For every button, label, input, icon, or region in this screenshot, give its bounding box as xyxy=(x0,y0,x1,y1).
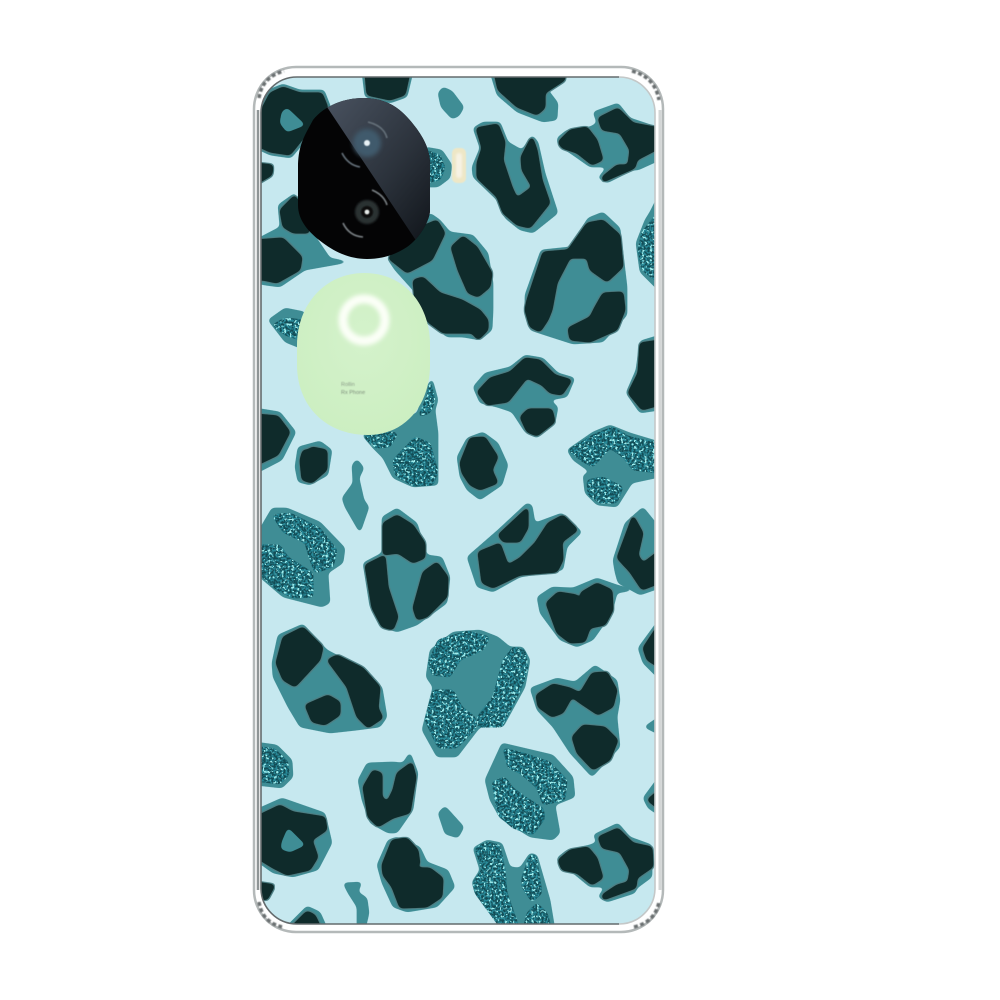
spot: top right xyxy=(557,103,660,183)
spot: bottom left xyxy=(255,798,332,877)
spot: behind camera glitter xyxy=(425,147,452,187)
spot: centre right xyxy=(473,355,575,438)
spot: glitter under pill xyxy=(362,378,438,487)
spot: glitter large centre xyxy=(422,630,530,757)
spot: right edge tiny xyxy=(644,782,654,813)
small print: Rx Phone xyxy=(341,390,365,396)
upper lens xyxy=(342,122,387,167)
spot: left edge small xyxy=(262,162,274,184)
spot: left edge glitter xyxy=(262,742,294,788)
lower lens xyxy=(343,190,387,237)
spot: right edge dark xyxy=(626,336,654,413)
spot: small teal top xyxy=(438,87,464,119)
corner air cushions xyxy=(259,71,659,927)
small print xyxy=(341,382,365,396)
spot: left dark xyxy=(262,408,296,471)
spot: top right of centre xyxy=(491,78,567,122)
green pill module xyxy=(297,273,430,435)
spot: large right xyxy=(525,212,627,344)
spot: centre dark xyxy=(363,508,450,632)
small print: Rollin xyxy=(341,382,355,388)
spot: dark oval centre xyxy=(457,432,508,500)
spot: lower left xyxy=(272,624,387,733)
spot: small teal right xyxy=(646,720,654,732)
camera module xyxy=(298,98,440,259)
camera flash xyxy=(452,148,466,183)
spot: bottom centre xyxy=(377,837,455,912)
spot: bottom right xyxy=(557,823,653,902)
spot: behind camera left xyxy=(262,194,344,287)
spot: behind pill left glitter xyxy=(269,308,304,348)
phone case back panel xyxy=(261,77,655,924)
spot: glitter lower xyxy=(485,743,575,840)
spot: small teal sliver xyxy=(342,459,369,533)
spot: top centre xyxy=(362,78,412,103)
spot: glitter left xyxy=(255,508,345,607)
spot: large centre xyxy=(387,213,493,340)
spot: top left xyxy=(255,84,331,158)
spot: L shape xyxy=(472,122,558,233)
spot: glitter right xyxy=(567,425,660,507)
spot: right middle xyxy=(612,508,654,595)
spot: glitter bottom xyxy=(472,840,555,930)
spot: corner dark xyxy=(262,881,275,902)
lens glare xyxy=(321,98,440,245)
light ring xyxy=(343,299,385,341)
case frame xyxy=(254,67,663,932)
spot: right lower dark xyxy=(530,665,620,777)
spot: centre right dark xyxy=(467,503,582,592)
spot: bottom dark xyxy=(283,906,328,930)
leopard print pattern xyxy=(255,72,660,930)
spot: right edge lower xyxy=(638,625,654,675)
spot: centre lower dark xyxy=(358,752,418,833)
spot: heart shape xyxy=(537,578,635,647)
spot: right edge glitter xyxy=(636,202,654,287)
spot: small dark oval xyxy=(295,441,332,485)
spot: small teal oval xyxy=(438,806,464,838)
spot: bottom teal sliver xyxy=(343,882,369,930)
